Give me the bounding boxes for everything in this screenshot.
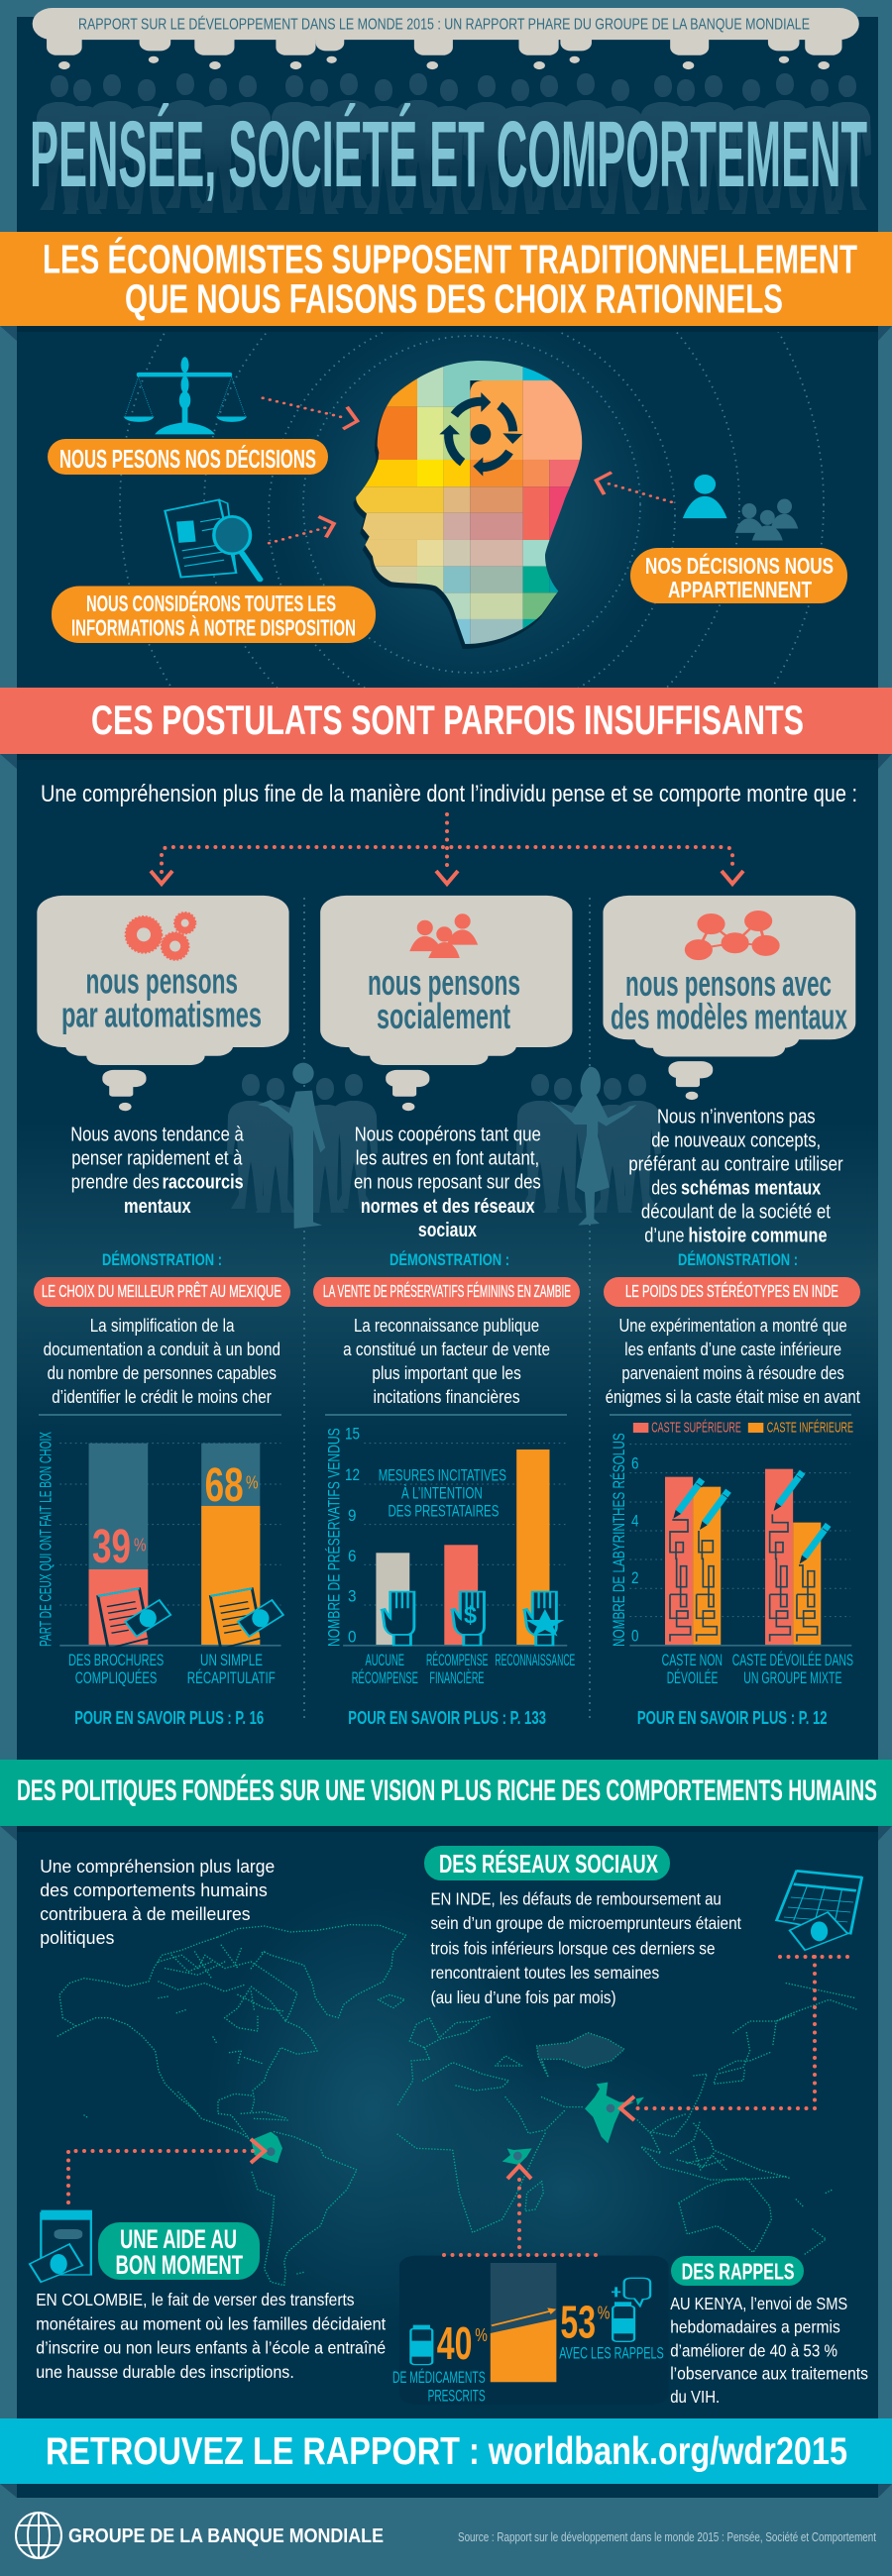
- panel: réseaux sociaux: EN INDE, les défauts de remboursement au: [430, 1889, 722, 1909]
- icon: circular arrows: [439, 392, 522, 477]
- panel: socialement: La reconnaissance publique: [354, 1315, 539, 1336]
- panel: socialement: [313, 896, 580, 1728]
- cyan call to action band: [0, 2418, 892, 2498]
- icon: documents and magnifier: [165, 499, 260, 580]
- intro: policy: Une compréhension plus large: [40, 1856, 275, 1877]
- panel: rappels: DES RAPPELS: [682, 2259, 795, 2285]
- panel: socialement: plus important que les: [372, 1362, 521, 1383]
- silhouettes: crowd and man: [227, 1063, 378, 1229]
- chart: condom sales: RÉCOMPENSE: [352, 1668, 418, 1687]
- chart: mazes by caste: CASTE NON: [662, 1651, 723, 1669]
- icon: coloured head: [347, 360, 589, 649]
- chart: loan choice: 68: [205, 1459, 244, 1512]
- arrow: chart to Kenya: [444, 2166, 597, 2255]
- chart: condom sales: DES PRESTATAIRES: [389, 1501, 499, 1520]
- chart: medication adherence: 40: [437, 2317, 472, 2369]
- panel: socialement: socialement: [377, 996, 510, 1036]
- panel: rappels: hebdomadaires a permis: [670, 2316, 840, 2336]
- chart: condom sales: [325, 1425, 575, 1687]
- callout: nous pesons: NOUS PESONS NOS DÉCISIONS: [59, 444, 316, 474]
- panel: modèles mentaux: schémas mentaux: [681, 1177, 822, 1199]
- icon: people: [683, 475, 798, 541]
- world map: [57, 1882, 857, 2338]
- panel: socialement: POUR EN SAVOIR PLUS : P. 133: [348, 1707, 546, 1728]
- panel: modèles mentaux: préférant au contraire utiliser: [628, 1152, 843, 1175]
- panel: réseaux sociaux: sein d’un groupe de microemprunteurs étaient: [430, 1913, 741, 1933]
- chart: mazes by caste: 4: [631, 1512, 638, 1531]
- footer logo: GROUPE DE LA BANQUE MONDIALE: [68, 2525, 384, 2547]
- panel: socialement: LA VENTE DE PRÉSERVATIFS FÉMININS EN ZAMBIE: [323, 1281, 571, 1301]
- chart: medication adherence: [392, 2256, 668, 2405]
- panel: socialement: incitations financières: [373, 1386, 520, 1407]
- silhouettes: crowd and woman: [516, 1067, 661, 1226]
- panel: aide au bon moment: BON MOMENT: [115, 2250, 243, 2280]
- map: Americas: [57, 1925, 406, 2286]
- panel: aide au bon moment: monétaires au moment où les familles décidaient: [36, 2314, 386, 2334]
- chart: condom sales: AUCUNE: [365, 1651, 404, 1669]
- mazes and pencils: [670, 1472, 829, 1642]
- panel: modèles mentaux: de nouveaux concepts,: [651, 1129, 821, 1152]
- panel: automatismes: LE CHOIX DU MEILLEUR PRÊT AU MEXIQUE: [42, 1281, 281, 1301]
- chart: medication adherence: 53: [560, 2296, 596, 2347]
- callout: nous pesons: [48, 439, 328, 475]
- callout: nous considérons: NOUS CONSIDÉRONS TOUTES LES: [86, 590, 336, 616]
- panel: modèles mentaux: [603, 896, 860, 1728]
- panel: réseaux sociaux: DES RÉSEAUX SOCIAUX: [439, 1849, 658, 1878]
- panel: modèles mentaux: DÉMONSTRATION :: [678, 1250, 798, 1269]
- panel: modèles mentaux: Nous n’inventons pas: [657, 1106, 816, 1127]
- panel: réseaux sociaux: (au lieu d’une fois par mois): [430, 1987, 616, 2007]
- panel: automatismes: du nombre de personnes capables: [48, 1362, 277, 1383]
- panel: automatismes: par automatismes: [61, 995, 262, 1035]
- chart: mazes by caste: [610, 1419, 853, 1687]
- panel: aide au bon moment: [36, 2222, 386, 2382]
- top thought cloud with report label: [33, 8, 859, 69]
- panel: socialement: nous pensons: [368, 962, 520, 1003]
- chart: medication adherence: AVEC LES RAPPELS: [559, 2344, 664, 2363]
- panel: automatismes: prendre des: [71, 1171, 160, 1194]
- chart: mazes by caste: CASTE SUPÉRIEURE: [651, 1419, 741, 1436]
- chart: medication adherence: DE MÉDICAMENTS: [392, 2368, 486, 2387]
- chart: condom sales: 3: [348, 1587, 357, 1606]
- callout: nos décisions: [630, 548, 847, 603]
- chart: loan choice: RÉCAPITULATIF: [187, 1668, 276, 1687]
- panel: automatismes: raccourcis: [163, 1171, 244, 1194]
- panel: aide au bon moment: d’inscrire ou non leurs enfants à l’école a entraîné: [36, 2338, 386, 2358]
- panel: modèles mentaux: les enfants d’une caste inférieure: [624, 1339, 841, 1359]
- panel: automatismes: d’identifier le crédit le moins cher: [52, 1386, 272, 1407]
- panel: socialement: normes et des réseaux: [361, 1195, 535, 1218]
- chart: loan choice: %: [134, 1536, 147, 1556]
- chart: condom sales: 0: [348, 1628, 357, 1647]
- thought bubble 3: [603, 896, 855, 1100]
- panel: rappels: du VIH.: [670, 2387, 720, 2407]
- chart: medication adherence: PRESCRITS: [428, 2386, 486, 2405]
- intro: policy: [40, 1856, 275, 1948]
- arrow: calendar to India: [620, 1957, 851, 2120]
- chart: condom sales: RECONNAISSANCE: [495, 1651, 575, 1669]
- chart: condom sales: MESURES INCITATIVES: [379, 1465, 506, 1484]
- map: Europe, Africa, Asia, Oceania: [396, 1984, 857, 2256]
- chart: mazes by caste: DÉVOILÉE: [667, 1668, 718, 1687]
- callout: nous considérons: INFORMATIONS À NOTRE DISPOSITION: [71, 614, 356, 640]
- arrow tree: [151, 814, 743, 884]
- intro: policy: des comportements humains: [40, 1879, 268, 1900]
- panel: rappels: AU KENYA, l’envoi de SMS: [670, 2294, 847, 2313]
- thought bubble 1: [37, 896, 289, 1111]
- panel: rappels: d’améliorer de 40 à 53 %: [670, 2340, 837, 2360]
- chart: loan choice: PART DE CEUX QUI ONT FAIT LE BON CHOIX: [37, 1432, 56, 1647]
- arrow: documents to head: [270, 516, 334, 543]
- panel: réseaux sociaux: trois fois inférieurs lorsque ces derniers se: [430, 1939, 716, 1959]
- chart: mazes by caste: NOMBRE DE LABYRINTHES RÉSOLUS: [610, 1433, 628, 1647]
- panel: automatismes: mentaux: [124, 1195, 191, 1218]
- thought bubble 2: [320, 896, 572, 1111]
- chart: condom sales: NOMBRE DE PRÉSERVATIFS VENDUS: [325, 1428, 344, 1647]
- arrow: book to Colombia: [68, 2139, 265, 2202]
- chart: loan choice: %: [246, 1473, 258, 1493]
- chart: mazes by caste: 2: [631, 1568, 638, 1587]
- chart: condom sales: FINANCIÈRE: [429, 1668, 484, 1687]
- chart: loan choice: [37, 1432, 283, 1687]
- panel: aide au bon moment: EN COLOMBIE, le fait de verser des transferts: [36, 2290, 355, 2309]
- panel: aide au bon moment: une hausse durable des inscriptions.: [36, 2362, 294, 2382]
- panel: modèles mentaux: d’une: [644, 1224, 684, 1246]
- panel: automatismes: DÉMONSTRATION :: [102, 1250, 222, 1269]
- panel: socialement: a constitué un facteur de vente: [343, 1339, 550, 1359]
- panel: automatismes: Nous avons tendance à: [70, 1124, 244, 1145]
- icon: book and money: [30, 2210, 92, 2282]
- panel: aide au bon moment: UNE AIDE AU: [120, 2224, 237, 2254]
- chart: condom sales: 12: [345, 1465, 360, 1484]
- coral heading band: [0, 688, 892, 769]
- column glow and separators: [17, 898, 878, 1722]
- panel: automatismes: [34, 896, 290, 1728]
- concentric dotted circles and glow: [119, 332, 825, 688]
- intro: policy: politiques: [40, 1927, 114, 1948]
- panel: socialement: en nous reposant sur des: [354, 1171, 541, 1194]
- footer logo: [16, 2513, 384, 2558]
- intro: policy: contribuera à de meilleures: [40, 1903, 251, 1924]
- panel: automatismes: POUR EN SAVOIR PLUS : P. 16: [74, 1707, 264, 1728]
- panel: réseaux sociaux: [424, 1846, 741, 2007]
- icon: scales: [124, 357, 247, 434]
- chart: loan choice: 39: [92, 1521, 131, 1573]
- chart: medication adherence: %: [475, 2325, 488, 2345]
- chart: condom sales: 9: [348, 1506, 357, 1525]
- panel: socialement: Nous coopérons tant que: [355, 1124, 541, 1145]
- panel: automatismes: nous pensons: [85, 961, 238, 1002]
- orange heading band: [0, 232, 892, 341]
- panel: modèles mentaux: des: [651, 1177, 677, 1199]
- arrow: people to head: [597, 473, 671, 502]
- icon: gears: [126, 912, 196, 960]
- panel: automatismes: penser rapidement et à: [71, 1147, 243, 1170]
- chart: mazes by caste: 6: [631, 1454, 638, 1473]
- chart: loan choice: COMPLIQUÉES: [75, 1668, 157, 1687]
- crowd silhouettes: [36, 73, 871, 214]
- panel: socialement: sociaux: [418, 1219, 477, 1241]
- chart: loan choice: UN SIMPLE: [200, 1651, 263, 1669]
- chart: loan choice: DES BROCHURES: [68, 1651, 164, 1669]
- chart: mazes by caste: 0: [631, 1627, 638, 1646]
- icon: calendar and money: [777, 1871, 862, 1950]
- panel: automatismes: documentation a conduit à un bond: [44, 1339, 280, 1359]
- chart: condom sales: RÉCOMPENSE: [426, 1651, 488, 1669]
- arrow: scales to head: [263, 398, 357, 429]
- callout: nos décisions: APPARTIENNENT: [668, 577, 812, 602]
- chart: medication adherence: %: [598, 2304, 610, 2323]
- panel: socialement: DÉMONSTRATION :: [390, 1250, 509, 1269]
- panel: automatismes: La simplification de la: [90, 1315, 235, 1336]
- panel: rappels: l’observance aux traitements: [670, 2364, 868, 2384]
- chart: condom sales: $: [464, 1602, 478, 1629]
- panel: modèles mentaux: découlant de la société et: [641, 1201, 831, 1223]
- green heading band: [0, 1760, 892, 1841]
- panel: socialement: les autres en font autant,: [356, 1147, 539, 1170]
- chart: condom sales: 6: [348, 1547, 357, 1565]
- callout: nous considérons: [52, 587, 376, 643]
- chart: condom sales: 15: [345, 1425, 360, 1444]
- panel: modèles mentaux: parvenaient moins à résoudre des: [621, 1362, 844, 1383]
- panel: modèles mentaux: histoire commune: [688, 1224, 827, 1246]
- panel: rappels: [670, 2256, 868, 2407]
- chart: condom sales: À L’INTENTION: [401, 1483, 483, 1502]
- panel: réseaux sociaux: rencontraient toutes les semaines: [430, 1963, 659, 1983]
